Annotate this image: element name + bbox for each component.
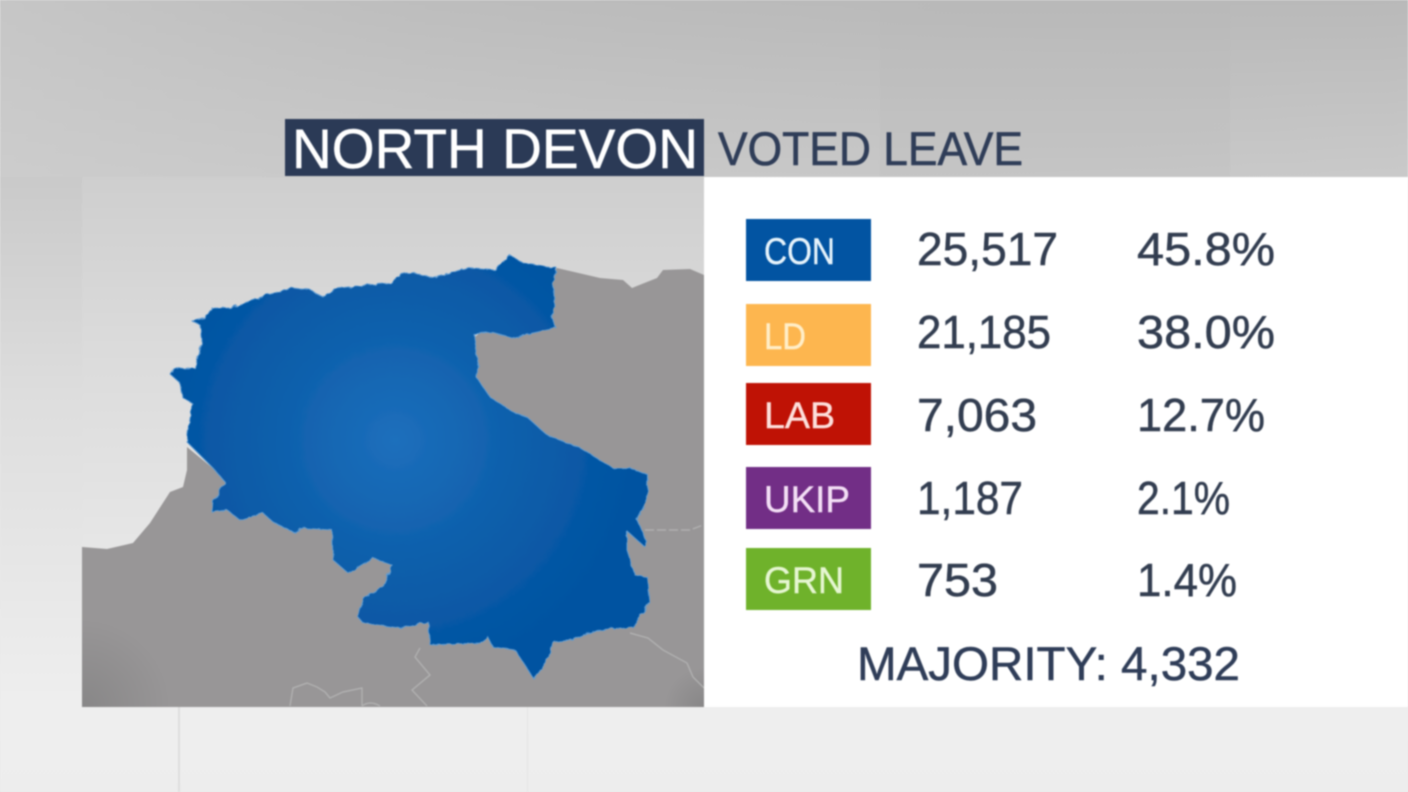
row: UKIP: 2.1%: [1137, 472, 1230, 524]
row: LAB: 12.7%: [1137, 389, 1265, 441]
row: LAB: 7,063: [917, 389, 1037, 441]
majority: MAJORITY: 4,332: [857, 637, 1240, 690]
title: NORTH DEVON: [292, 117, 698, 180]
row: LD: 38.0%: [1137, 306, 1275, 358]
row: GRN: [746, 548, 1237, 610]
row: LD: LD: [764, 316, 806, 357]
sea: [82, 177, 704, 707]
row: GRN: 753: [917, 554, 998, 606]
row: CON: [746, 219, 1275, 281]
subtitle: VOTED LEAVE: [718, 122, 1023, 175]
row: GRN: GRN: [764, 560, 844, 601]
row: CON: 45.8%: [1137, 223, 1275, 275]
constituency: North Devon: [169, 255, 650, 679]
row: LD: 21,185: [917, 306, 1051, 358]
results panel: [704, 177, 1408, 707]
row: GRN: 1.4%: [1137, 554, 1237, 606]
row: LAB: [746, 383, 1265, 445]
map panel: [81, 254, 705, 708]
row: CON: 25,517: [917, 223, 1058, 275]
surrounding land: [82, 268, 704, 707]
row: CON: CON: [764, 231, 835, 272]
internal boundaries: [290, 525, 704, 706]
row: UKIP: UKIP: [764, 479, 850, 520]
row: UKIP: [746, 467, 1230, 529]
row: LAB: LAB: [764, 395, 835, 436]
row: UKIP: 1,187: [917, 472, 1023, 524]
row: LD: [746, 304, 1275, 366]
